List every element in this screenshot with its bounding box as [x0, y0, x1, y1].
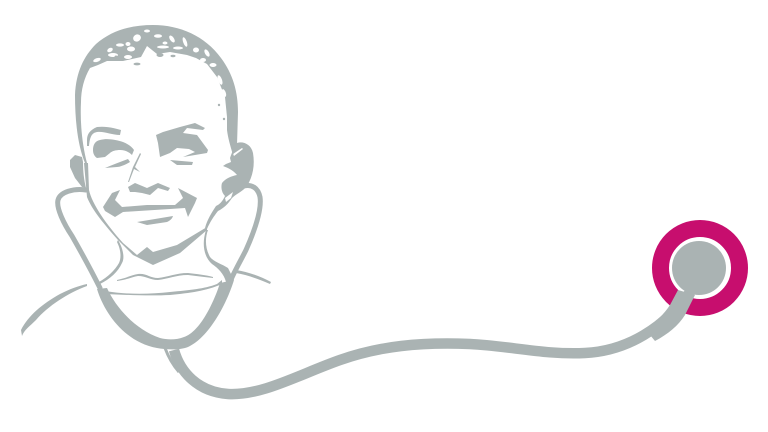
boy's head and face — [70, 25, 254, 284]
left ear — [70, 155, 86, 188]
hair highlights — [93, 30, 227, 97]
headset left arm — [58, 189, 100, 288]
right shoulder — [236, 270, 271, 284]
yoke — [97, 280, 234, 349]
left shoulder — [21, 284, 87, 336]
right under-eye — [170, 160, 193, 165]
magenta ring — [660, 228, 740, 308]
tube neck over ring — [645, 290, 695, 341]
headset right arm — [230, 185, 260, 282]
right neck line — [204, 230, 234, 282]
nose — [128, 183, 170, 195]
neck, collar and shoulders — [21, 230, 271, 336]
jaw and chin — [84, 163, 207, 265]
left eye — [93, 139, 134, 158]
stethoscope — [58, 185, 695, 394]
hair flecks — [114, 50, 225, 120]
collar bottom line — [105, 280, 222, 295]
nose line — [128, 153, 141, 182]
thin tube strand — [165, 348, 179, 372]
left under-eye — [105, 159, 130, 168]
main tube — [174, 285, 695, 394]
left neck line — [99, 240, 123, 284]
right ear — [205, 142, 254, 229]
grey disc — [672, 241, 726, 295]
collar top line — [117, 273, 213, 281]
lower lip — [137, 216, 173, 225]
right eye and brow — [156, 123, 208, 157]
left eyebrow — [87, 127, 121, 146]
chest piece target — [645, 228, 740, 341]
mouth — [103, 188, 197, 217]
head outline with hair — [75, 25, 238, 163]
